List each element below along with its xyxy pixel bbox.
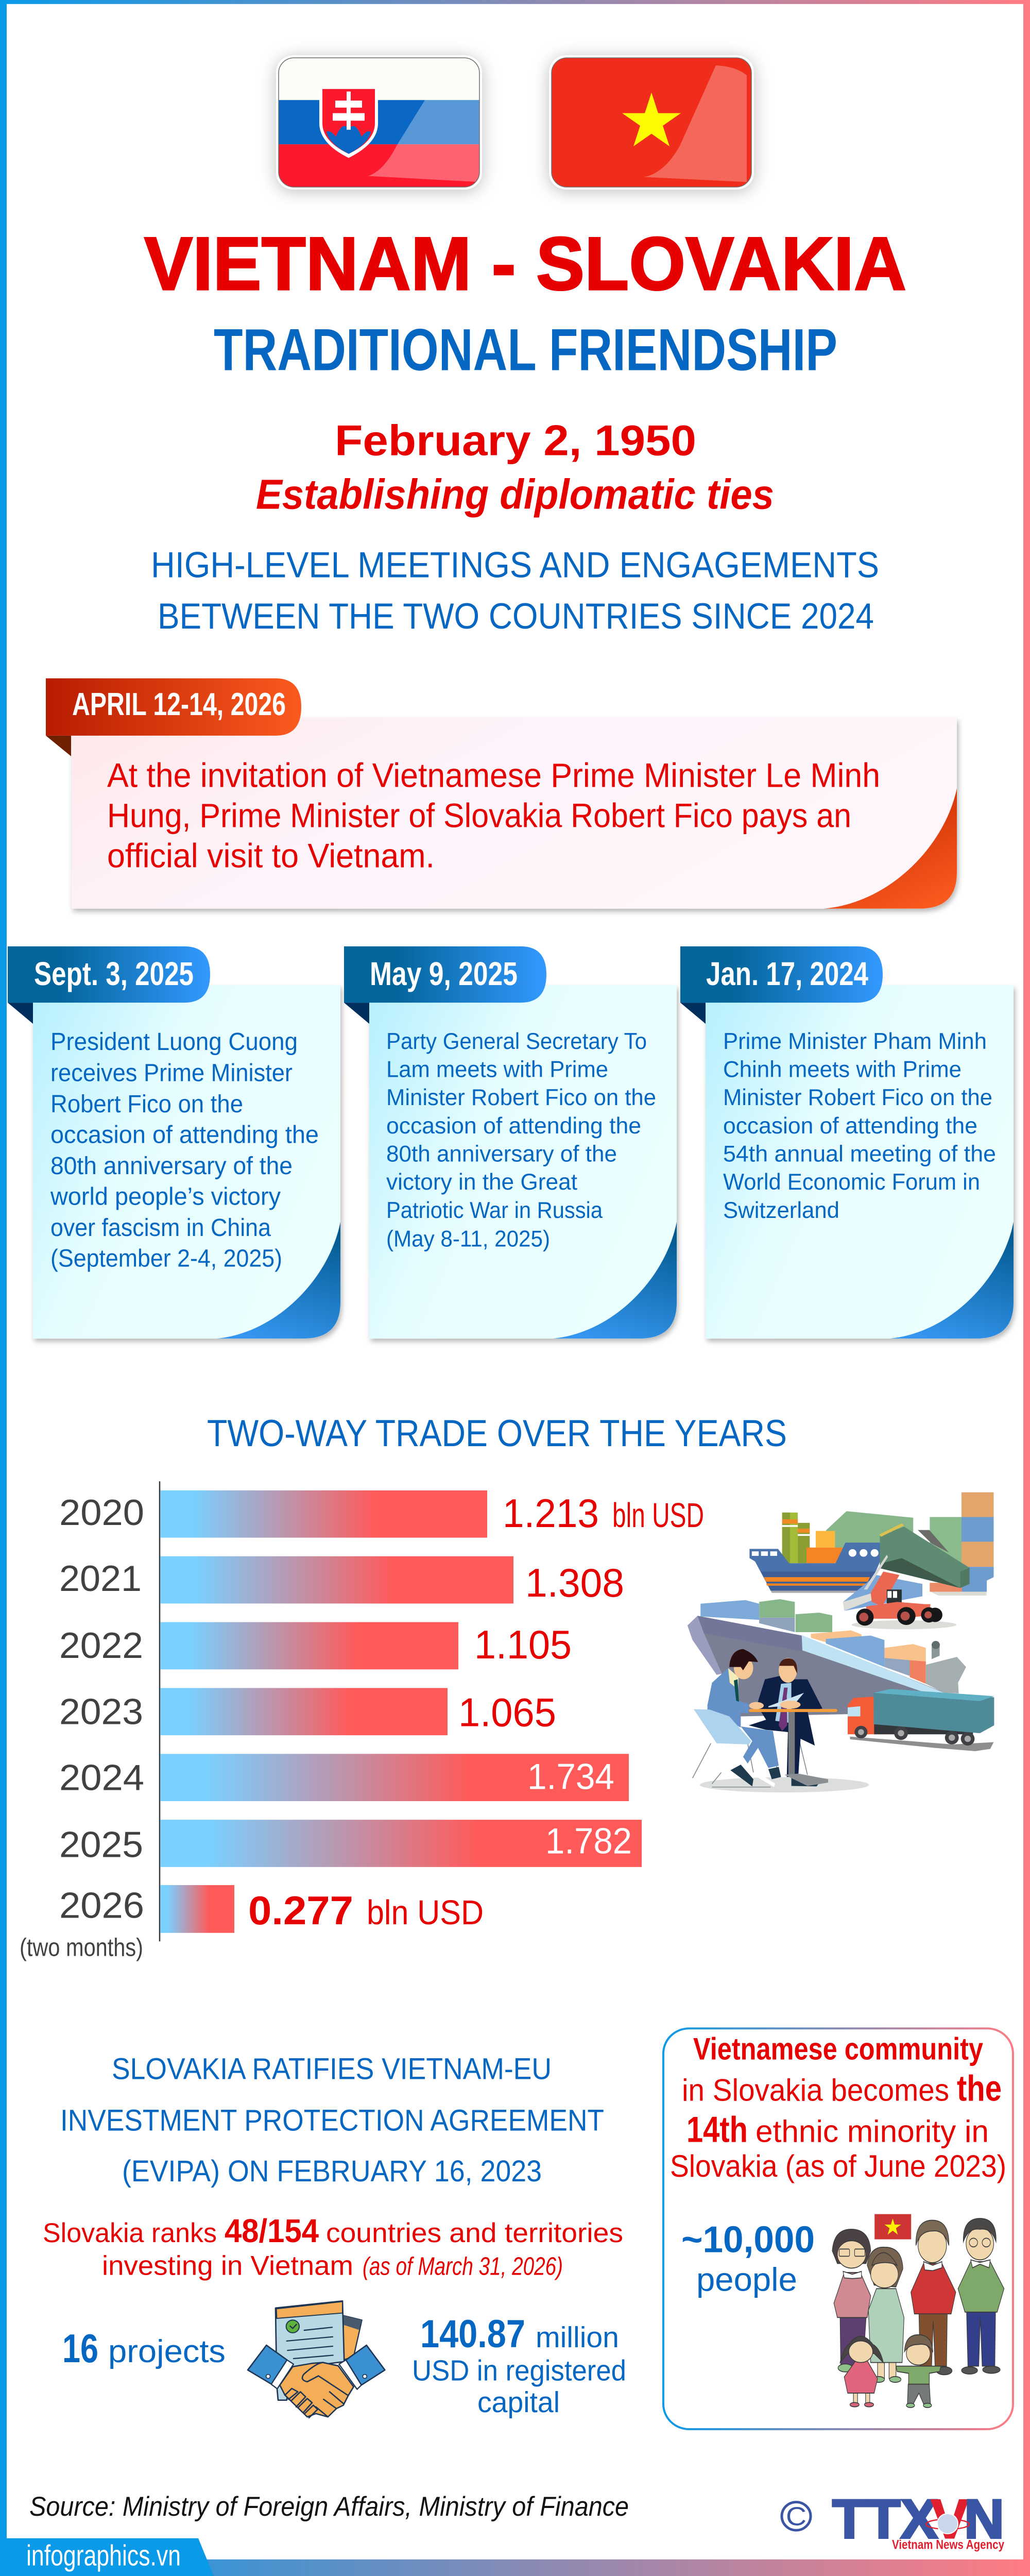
card body	[369, 985, 677, 1338]
bar chart: two-way trade: 2023	[59, 1692, 143, 1732]
website label: infographics.vn	[26, 2539, 181, 2572]
description: Robert Fico on the	[50, 1090, 243, 1118]
bar chart: two-way trade: 1.213	[503, 1490, 599, 1536]
description: Minister Robert Fico on the	[723, 1084, 992, 1110]
description: occasion of attending the	[386, 1112, 641, 1139]
bar chart: two-way trade: 0.277	[248, 1888, 353, 1933]
date tab label: May 9, 2025	[370, 955, 518, 992]
description: over fascism in China	[50, 1214, 271, 1242]
girl	[840, 2336, 883, 2407]
investment ranking: countries and territories	[326, 2218, 623, 2248]
trade heading: TWO-WAY TRADE OVER THE YEARS	[207, 1412, 787, 1454]
card corner swoosh	[890, 1222, 1014, 1338]
stat: 16 projects	[62, 2326, 226, 2371]
title: VIETNAM - SLOVAKIA	[144, 222, 906, 306]
panel: Jan 2024	[680, 946, 1014, 1338]
EVIPA heading: SLOVAKIA RATIFIES VIETNAM-EU	[112, 2052, 552, 2086]
date tab	[46, 679, 301, 736]
visit description	[107, 757, 880, 875]
EVIPA heading: (EVIPA) ON FEBRUARY 16, 2023	[122, 2154, 542, 2188]
businessmen at table	[693, 1649, 869, 1792]
section heading: high-level meetings: BETWEEN THE TWO COUNTRIES SINCE 2024	[158, 597, 874, 637]
bar chart: two-way trade: 1.105	[474, 1622, 572, 1667]
description	[50, 1028, 319, 1272]
bar chart: two-way trade: 2022	[59, 1626, 143, 1666]
description: occasion of attending the	[50, 1121, 319, 1148]
section heading: high-level meetings: HIGH-LEVEL MEETINGS AND ENGAGEMENTS	[151, 545, 879, 585]
description: 80th anniversary of the	[386, 1141, 617, 1166]
date tab fold	[8, 1003, 33, 1024]
logo: Vietnam News Agency: N	[964, 2488, 1004, 2550]
icon: Slovakia flag	[276, 55, 482, 190]
description: World Economic Forum in	[723, 1169, 980, 1195]
woman in green dress	[867, 2247, 904, 2382]
description: Prime Minister Pham Minh	[723, 1028, 987, 1054]
description	[723, 1028, 996, 1223]
bar chart: two-way trade: bln USD	[367, 1894, 484, 1932]
panel: Sept 2025	[8, 946, 340, 1338]
bar chart: two-way trade: 2025	[59, 1825, 143, 1865]
man in red sweater	[911, 2220, 956, 2375]
bar chart: two-way trade: 2026	[59, 1886, 144, 1926]
logo: copyright mark	[782, 2501, 811, 2531]
logo: Vietnam News Agency	[832, 2488, 1005, 2552]
bar chart: two-way trade: (two months)	[20, 1934, 143, 1961]
cargo ship	[749, 1511, 913, 1593]
description: victory in the Great	[386, 1169, 577, 1195]
description: (May 8-11, 2025)	[386, 1226, 550, 1251]
subtitle: TRADITIONAL FRIENDSHIP	[214, 316, 837, 383]
card body	[33, 985, 340, 1338]
bar chart: two-way trade: 2021	[59, 1559, 142, 1599]
description: Patriotic War in Russia	[386, 1197, 603, 1223]
stat: 16 projects: 16	[62, 2326, 98, 2371]
stat: registered capital: 140.87	[420, 2312, 525, 2356]
description: Chinh meets with Prime	[723, 1056, 962, 1082]
icon: Vietnam flag	[549, 55, 754, 190]
bar chart: two-way trade: 2024	[59, 1758, 144, 1798]
community text	[670, 2031, 1006, 2183]
stat: registered capital: million	[536, 2321, 619, 2354]
investment ranking: 48/154	[225, 2212, 319, 2249]
section heading: high-level meetings	[151, 545, 879, 637]
investment ranking: investing in Vietnam	[102, 2251, 353, 2281]
community text: in Slovakia becomes	[682, 2073, 949, 2108]
description: Lam meets with Prime	[386, 1056, 608, 1082]
footer bar	[0, 2538, 1030, 2576]
panel: May 2025	[344, 946, 677, 1338]
card corner swoosh	[553, 1222, 677, 1338]
panel border	[663, 2028, 1013, 2429]
stat: 10,000 people: ~10,000	[681, 2219, 815, 2260]
date heading: February 2, 1950	[335, 416, 696, 465]
icon: handshake and document	[248, 2301, 385, 2418]
flags	[276, 55, 754, 190]
visit description: official visit to Vietnam.	[107, 837, 435, 875]
description: (September 2-4, 2025)	[50, 1245, 282, 1272]
truck	[848, 1689, 994, 1751]
bar chart: two-way trade: 1.308	[525, 1560, 624, 1605]
illustration: family with flag	[832, 2214, 1004, 2408]
date caption: Establishing diplomatic ties	[256, 471, 774, 518]
EVIPA heading	[60, 2052, 604, 2188]
bar chart: two-way trade: bln USD	[612, 1497, 704, 1535]
description: Switzerland	[723, 1197, 839, 1223]
large container ship	[688, 1599, 966, 1716]
description: receives Prime Minister	[50, 1059, 293, 1087]
logo: copyright mark: C	[786, 2501, 806, 2531]
description: 54th annual meeting of the	[723, 1141, 996, 1166]
description: 80th anniversary of the	[50, 1152, 293, 1180]
woman with glasses	[832, 2229, 871, 2372]
visit description: Hung, Prime Minister of Slovakia Robert Fico pays an	[107, 797, 851, 835]
bar chart: two-way trade: 1.782	[545, 1821, 632, 1861]
EVIPA heading: INVESTMENT PROTECTION AGREEMENT	[60, 2103, 604, 2137]
container forklift	[843, 1523, 970, 1629]
card body	[706, 985, 1014, 1338]
date tab fold	[680, 1003, 706, 1024]
date tab	[344, 946, 546, 1003]
logo: Vietnam News Agency: Vietnam News Agency	[892, 2538, 1005, 2552]
stat: registered capital: capital	[477, 2386, 560, 2419]
boy	[896, 2335, 941, 2408]
stat: 10,000 people: people	[696, 2261, 797, 2298]
stat: 10,000 people	[681, 2219, 815, 2298]
man with glasses	[958, 2218, 1004, 2374]
investment ranking: Slovakia ranks	[43, 2218, 217, 2248]
community text: the	[957, 2069, 1002, 2109]
description: Party General Secretary To	[386, 1028, 647, 1054]
card body	[72, 718, 957, 909]
stat: 16 projects: projects	[108, 2334, 226, 2369]
date tab label: Jan. 17, 2024	[706, 955, 868, 992]
description: President Luong Cuong	[50, 1028, 298, 1056]
bar chart: two-way trade: 1.734	[527, 1757, 614, 1797]
panel: April 2026 visit	[46, 679, 957, 909]
description: Minister Robert Fico on the	[386, 1084, 656, 1110]
date tab	[680, 946, 883, 1003]
community text: 14th	[686, 2110, 748, 2150]
investment ranking: (as of March 31, 2026)	[363, 2252, 563, 2280]
description: occasion of attending the	[723, 1112, 977, 1139]
logo: Vietnam News Agency: TTX	[832, 2488, 938, 2550]
date tab label: Sept. 3, 2025	[34, 955, 194, 992]
description: world people’s victory	[50, 1183, 281, 1210]
bar chart: two-way trade: 2020	[59, 1493, 144, 1533]
bar chart: two-way trade	[20, 1481, 704, 1961]
source: Source: Ministry of Foreign Affairs, Ministry of Finance	[29, 2492, 629, 2522]
visit description: At the invitation of Vietnamese Prime Minister Le Minh	[107, 757, 880, 794]
date tab label: APRIL 12-14, 2026	[72, 687, 286, 722]
investment ranking	[43, 2212, 623, 2281]
card corner swoosh	[217, 1222, 340, 1338]
date tab	[8, 946, 210, 1003]
panel: Vietnamese community	[663, 2028, 1013, 2429]
right container stack	[930, 1493, 993, 1596]
description	[386, 1028, 656, 1251]
date tab fold	[344, 1003, 369, 1024]
logo: Vietnam News Agency: V	[931, 2488, 968, 2550]
card corner swoosh	[824, 788, 957, 909]
small Vietnamese flag	[874, 2214, 911, 2240]
bar chart: two-way trade: 1.065	[458, 1689, 556, 1735]
date tab fold	[46, 736, 71, 756]
illustration: trade and logistics	[688, 1493, 994, 1792]
stat: registered capital: USD in registered	[412, 2354, 626, 2387]
community text: ethnic minority in	[756, 2114, 989, 2149]
stat: registered capital	[412, 2312, 626, 2419]
